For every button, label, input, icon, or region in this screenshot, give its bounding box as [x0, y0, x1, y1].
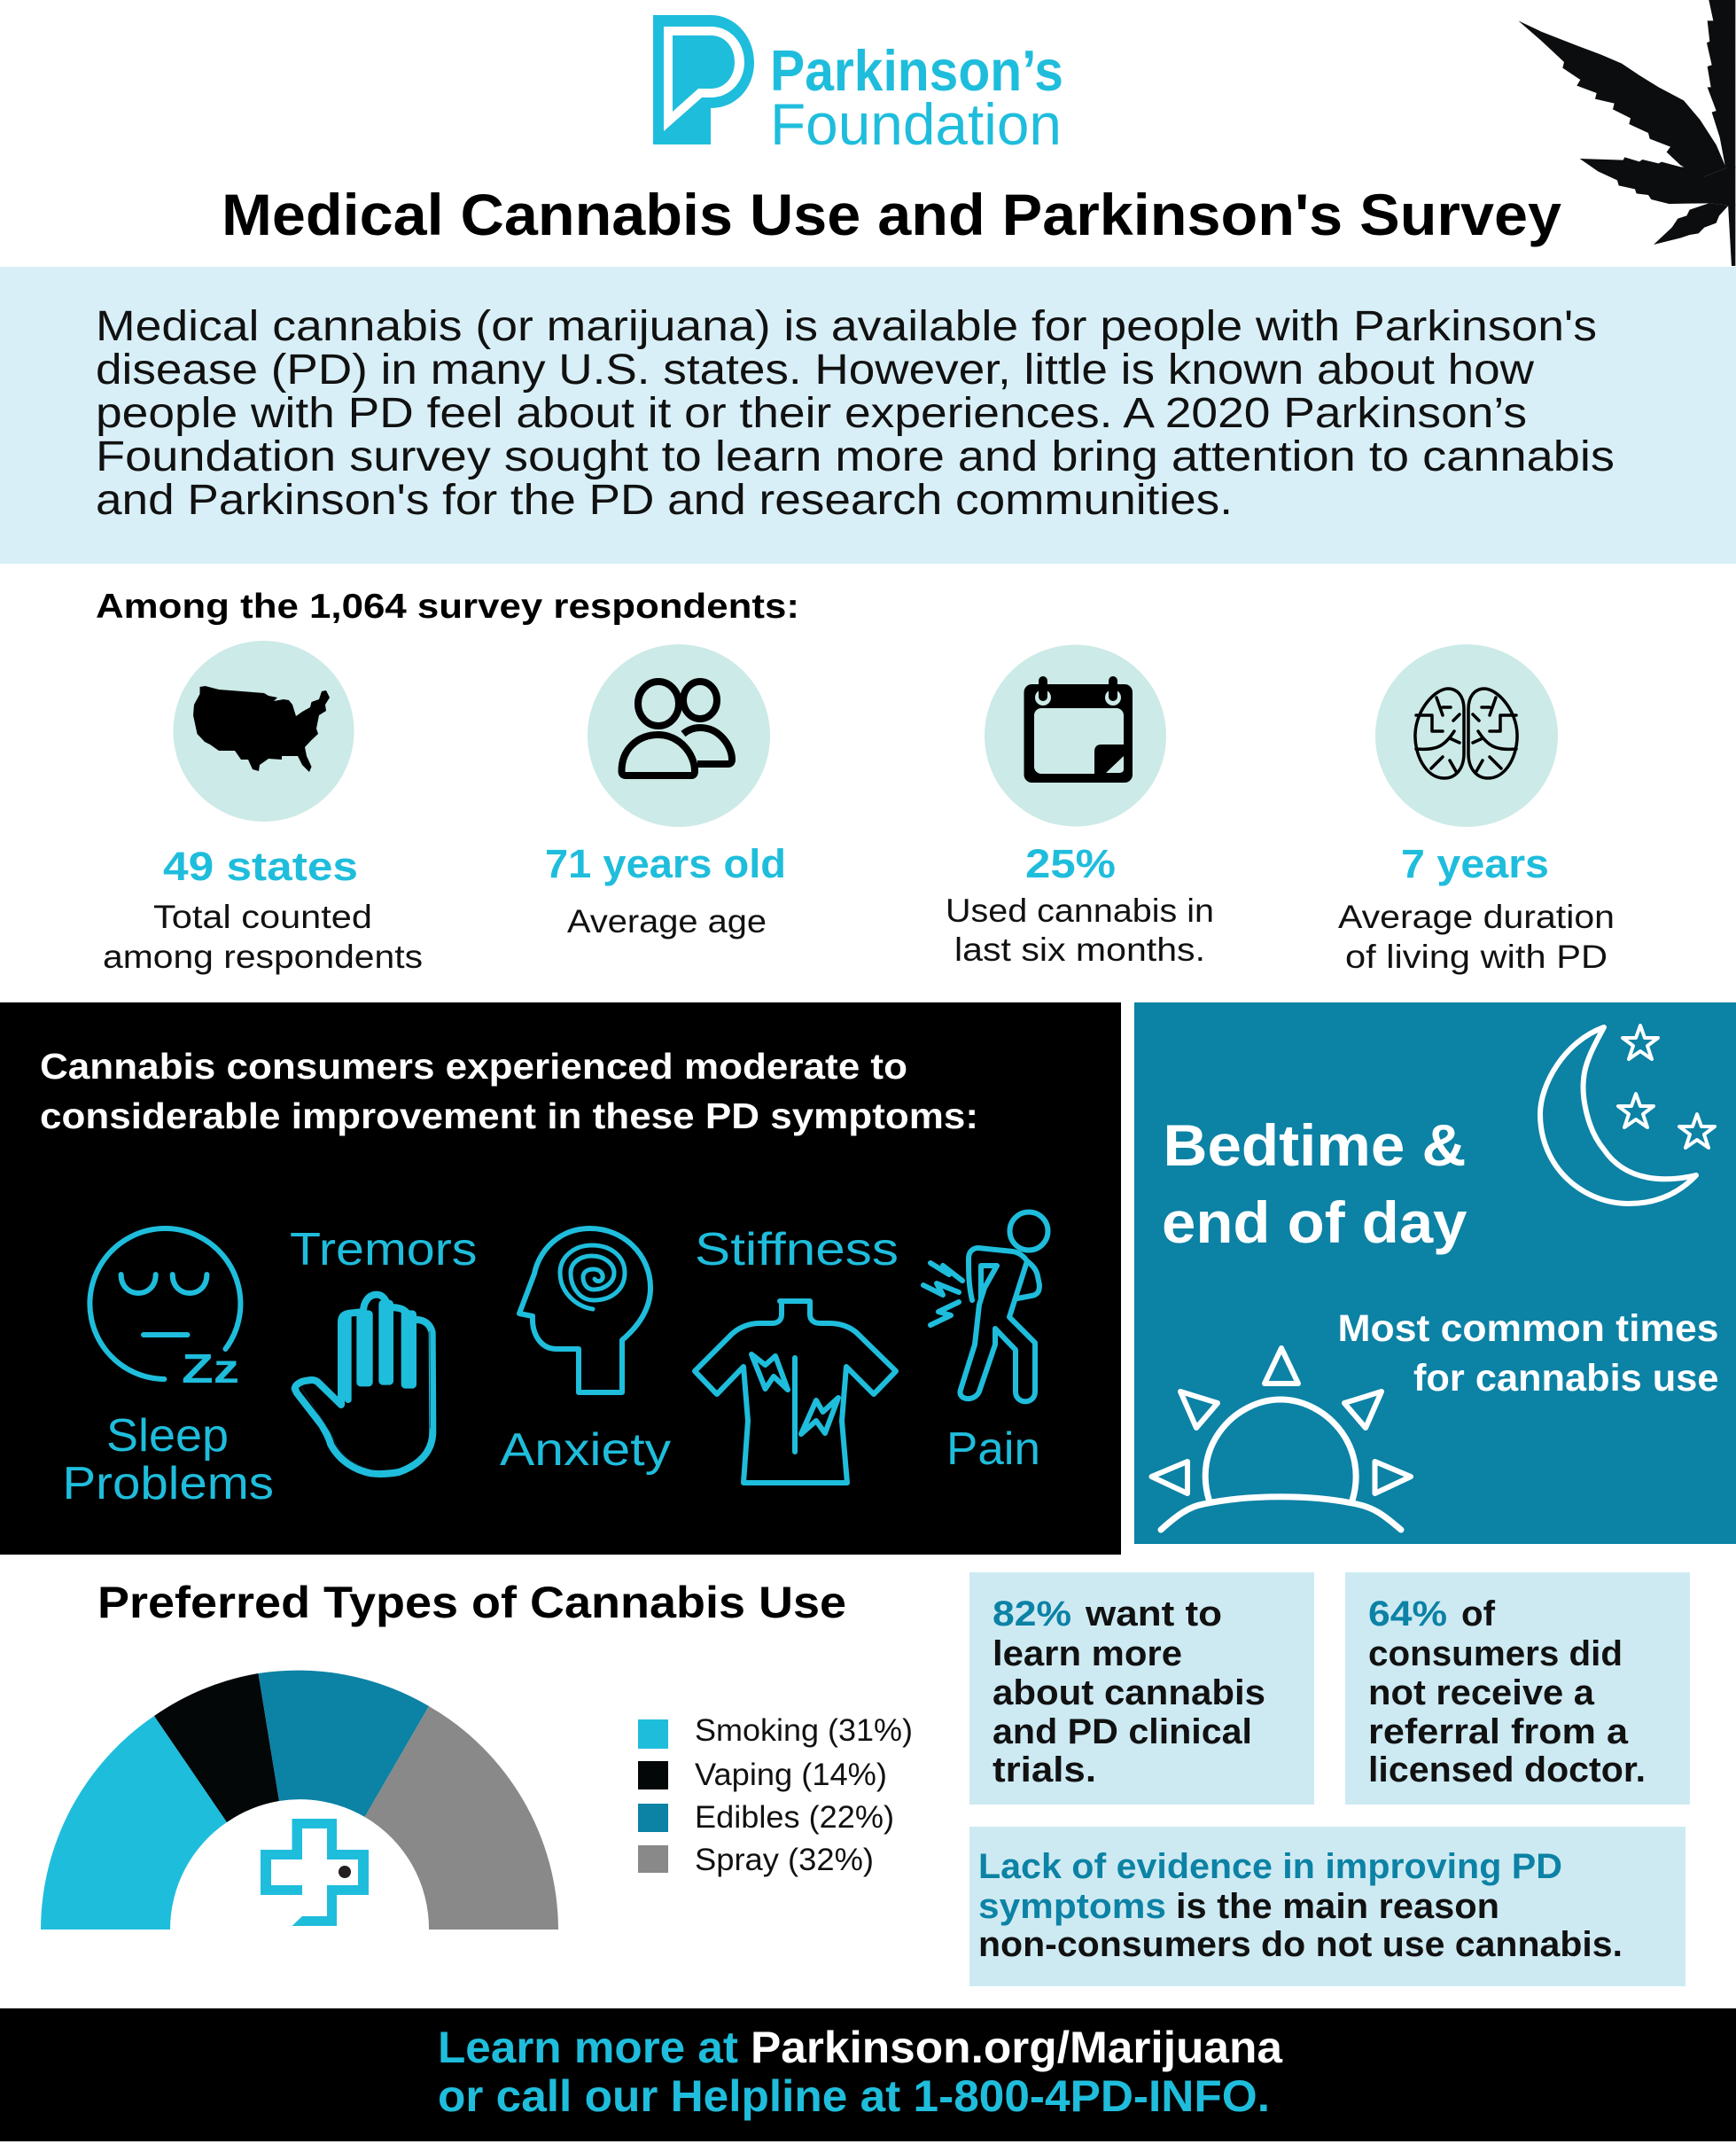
- callout: clinical trials: want to: [1085, 1594, 1222, 1633]
- stat value: 7 years: [1401, 841, 1549, 886]
- icon: medical cross: [261, 1819, 369, 1926]
- intro text block: Foundation survey sought to learn more and bring attention to cannabis: [96, 433, 1615, 480]
- stat: 7 years: [1338, 644, 1615, 975]
- callout: doctor referral: [1345, 1572, 1690, 1805]
- stat value: 49 states: [163, 844, 358, 889]
- symptom: pain: [923, 1212, 1047, 1475]
- symptoms heading: considerable improvement in these PD symptoms:: [40, 1095, 978, 1136]
- symptom: anxiety: [500, 1228, 671, 1476]
- bedtime subtext: for cannabis use: [1413, 1357, 1719, 1399]
- callout: lack of evidence: non-consumers do not use cannabis.: [978, 1925, 1623, 1964]
- logo wordmark: [770, 38, 1063, 157]
- footer: call to action: Learn more at: [438, 2023, 738, 2072]
- bedtime subtext: [1338, 1307, 1719, 1399]
- callout: doctor referral: consumers did: [1368, 1634, 1623, 1673]
- legend: edibles: Edibles (22%): [695, 1800, 894, 1835]
- panel: bedtime and end of day: [1134, 1002, 1736, 1544]
- intro text block: Medical cannabis (or marijuana) is available for people with Parkinson's: [96, 303, 1597, 350]
- stat: 49 states: [103, 641, 423, 975]
- panel: symptoms: [0, 1002, 1121, 1555]
- bedtime heading: end of day: [1162, 1189, 1467, 1255]
- callout: clinical trials: and PD clinical: [993, 1712, 1252, 1751]
- icon: P mark: [653, 15, 754, 144]
- icon: cannabis leaf: [1518, 0, 1735, 266]
- icon: sleeping face: Zz: [182, 1345, 239, 1392]
- title: Medical Cannabis Use and Parkinson's Survey: [222, 182, 1561, 247]
- callout: lack of evidence: is the main reason: [1176, 1887, 1499, 1926]
- chart legend: [638, 1713, 913, 1877]
- heading: survey respondents: Among the 1,064 survey respondents:: [96, 588, 799, 626]
- icon: sun rising: [1152, 1348, 1411, 1530]
- callout: clinical trials: [969, 1572, 1314, 1805]
- callout: clinical trials: 82%: [993, 1594, 1071, 1633]
- stat caption: Average duration: [1338, 899, 1615, 935]
- symptom label: [62, 1410, 274, 1509]
- legend: vaping: Vaping (14%): [695, 1758, 887, 1792]
- callout: clinical trials: learn more: [993, 1634, 1182, 1673]
- stat: 25%: [946, 645, 1214, 968]
- logo wordmark: Parkinson’s: [770, 38, 1063, 103]
- icon: person with back pain: [923, 1212, 1047, 1401]
- callout: doctor referral: 64%: [1368, 1594, 1447, 1633]
- footer: call to action: Parkinson.org/Marijuana: [751, 2023, 1283, 2072]
- stat caption: of living with PD: [1345, 939, 1608, 975]
- symptoms heading: [40, 1046, 978, 1136]
- stat caption: Average age: [567, 903, 767, 939]
- stat caption: Total counted: [153, 899, 372, 935]
- symptom label: Tremors: [290, 1224, 477, 1275]
- stat value: 25%: [1025, 841, 1116, 886]
- symptom label: Stiffness: [695, 1224, 899, 1275]
- callout: doctor referral: of: [1461, 1594, 1496, 1633]
- bedtime heading: Bedtime &: [1163, 1112, 1466, 1178]
- logo: Parkinson's Foundation: [653, 15, 1063, 157]
- stat caption: last six months.: [954, 932, 1205, 968]
- symptoms heading: Cannabis consumers experienced moderate to: [40, 1046, 907, 1087]
- callout: lack of evidence: Lack of evidence in improving PD: [978, 1847, 1562, 1886]
- footer: call to action: [0, 2008, 1736, 2141]
- symptom label: Anxiety: [500, 1424, 671, 1476]
- icon: calendar in circle: [985, 645, 1166, 826]
- callout: doctor referral: licensed doctor.: [1368, 1750, 1646, 1789]
- legend: smoking: Smoking (31%): [695, 1713, 913, 1748]
- intro text block: and Parkinson's for the PD and research communities.: [96, 477, 1233, 524]
- callout: doctor referral: referral from a: [1368, 1712, 1629, 1751]
- stat caption: among respondents: [103, 939, 423, 975]
- symptom: stiffness: [695, 1224, 899, 1483]
- stat caption: [946, 893, 1214, 968]
- symptom label: Problems: [62, 1458, 274, 1509]
- bedtime heading: [1162, 1112, 1467, 1255]
- intro text block: disease (PD) in many U.S. states. However, little is known about how: [96, 347, 1534, 394]
- logo wordmark: Foundation: [770, 91, 1062, 157]
- bedtime subtext: Most common times: [1338, 1307, 1719, 1350]
- icon: sleeping face: [90, 1228, 240, 1392]
- stat: 71 years old: [545, 644, 786, 939]
- stat caption: Used cannabis in: [946, 893, 1214, 929]
- callout: clinical trials: trials.: [993, 1750, 1096, 1789]
- callout: lack of evidence: [969, 1827, 1685, 1986]
- legend: spray: Spray (32%): [695, 1843, 874, 1877]
- chart: semi-donut of preferred types: [41, 1671, 558, 1930]
- heading: preferred types: Preferred Types of Cannabis Use: [97, 1578, 846, 1627]
- stat value: 71 years old: [545, 841, 786, 886]
- icon: brain in circle: [1375, 644, 1558, 827]
- callout: doctor referral: not receive a: [1368, 1673, 1595, 1712]
- symptom label: Sleep: [106, 1410, 229, 1462]
- callout: clinical trials: about cannabis: [993, 1673, 1265, 1712]
- stat caption: [103, 899, 423, 975]
- symptom: sleep problems: [62, 1228, 274, 1509]
- intro text block: [96, 303, 1615, 524]
- stat caption: [1338, 899, 1615, 975]
- icon: USA map in circle: [174, 641, 354, 822]
- footer: call to action: or call our Helpline at 1-800-4PD-INFO.: [438, 2071, 1270, 2121]
- symptom: tremors: [290, 1224, 477, 1474]
- intro text block: people with PD feel about it or their experiences. A 2020 Parkinson’s: [96, 390, 1527, 437]
- callout: lack of evidence: symptoms: [978, 1887, 1166, 1926]
- panel: introduction: [0, 267, 1736, 564]
- icon: people in circle: [588, 644, 770, 827]
- icon: head with spiral: [519, 1228, 650, 1392]
- icon: moon and stars: [1540, 1025, 1715, 1204]
- icon: shirt with lightning: [695, 1301, 896, 1483]
- icon: shaking hand: [295, 1295, 432, 1474]
- symptom label: Pain: [946, 1423, 1040, 1475]
